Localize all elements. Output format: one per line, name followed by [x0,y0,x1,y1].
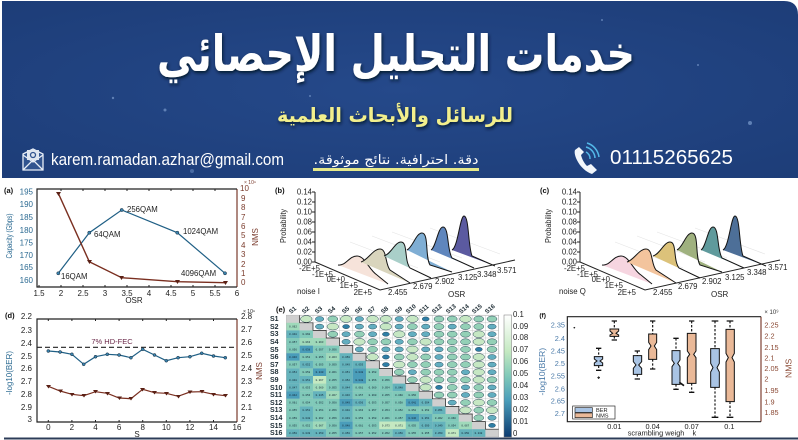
panel: chart b: -1E+5 [312,270,334,279]
left axis: 2.9 [21,403,33,412]
row labels: S12 [270,400,283,407]
left axis: 3 [28,415,33,424]
x axis: 6 [117,423,122,432]
lower triangle values: 0.061 0.054 0.052 0.058 0.049 0.056 0.053 0.057 0.058 0.041 0.054 [289,402,430,405]
panel: chart c: -2E+5 [564,264,586,273]
panel: chart b: 0.08 [297,218,312,226]
panel: chart b: 0.04 [297,238,313,246]
x axis: 5.5 [209,289,221,298]
panel: chart b: 2E+5 [354,288,373,297]
column labels: S14 [458,303,471,316]
x axis: 16 [233,423,242,432]
panel: chart b: 3.571 [497,266,517,275]
right axis: 2.15 [764,343,779,352]
panel: chart c: 3.571 [768,263,788,272]
left axis: 2.4 [21,339,33,348]
x axis: 6 [235,289,240,298]
left axis [551,321,565,418]
panel: chart c: -1E+5 [577,270,599,279]
banner [2,1,798,178]
axis titles: NMS [784,358,794,378]
quality labels: 64QAM [94,230,120,239]
colorbar: 0 [513,429,518,438]
left axis: 2.55 [551,372,565,381]
column labels: S7 [367,305,378,316]
left axis: 195 [20,188,34,196]
right axis: 1.95 [764,386,779,395]
row labels: S6 [270,354,279,361]
right axis: 6 [241,222,246,231]
row labels: S1 [270,316,279,323]
panel: chart c: 0.14 [562,188,578,196]
quality labels: 1024QAM [183,227,218,236]
right axis: 2.25 [764,321,779,330]
column labels: S6 [354,305,365,316]
axis titles: Capacity (Gbps) [5,213,14,258]
column labels: S9 [394,305,405,316]
row labels: S15 [270,423,283,430]
left axis: 2.6 [555,384,565,393]
panel: chart b: 0.10 [297,208,313,216]
x axis: 2.5 [77,289,89,298]
panel: chart c [540,186,788,299]
panel: chart c: 2.455 [653,288,673,297]
capacity line [57,208,227,275]
x axis: 0 [46,423,51,432]
right axis [764,309,779,417]
x axis: 14 [209,423,218,432]
column labels: S12 [431,303,444,316]
panel: chart b: 0.14 [297,188,313,196]
lower triangle values: 0.047 0.053 0.060 0.055 0.044 0.061 0.060 0.054 0.048 [289,386,403,389]
panel: chart c: OSR [711,290,729,299]
lower triangle values: 0.055 0.051 0.054 0.056 0.048 0.063 0.057 0.054 0.052 0.052 0.052 0.051 [289,409,443,412]
right axis: × 10⁹ [764,309,779,316]
panel: chart d: (d) [5,311,15,320]
row labels: S14 [270,415,283,422]
right axis: 1.85 [764,408,779,417]
row labels: S13 [270,407,283,414]
lower triangle values: 0.046 0.052 0.055 0.063 0.050 [289,356,350,359]
colorbar: 0.09 [513,322,528,331]
lower triangle values: 0.059 0.048 0.062 0.056 0.049 0.059 0.058 0.061 0.057 0.046 0.051 0.062 0.060 [289,417,456,420]
x axis: 0.01 [607,422,621,431]
left axis: 2.45 [551,347,565,356]
right axis: 2.7 [241,325,253,334]
email: karem.ramadan.azhar@gmail.com [51,150,284,169]
row labels: S10 [270,385,283,392]
colorbar: 0.03 [513,393,528,402]
column labels: S16 [484,303,497,316]
left axis: 190 [20,200,34,209]
x axis: 0.07 [685,422,699,431]
panel: chart c: 0.10 [562,208,578,216]
BER boxes [594,321,719,417]
right axis: 1.9 [764,397,775,406]
panel: chart a: (a) [4,186,14,195]
axis titles: NMS [251,228,260,246]
left axis: 165 [20,263,34,272]
right axis: 9 [241,194,246,203]
panel: chart c: 0.00 [562,258,578,266]
right axis [240,180,256,287]
x axis: 0.1 [724,422,734,431]
lower triangle values: 0.048 0.051 0.067 0.055 0.052 0.048 0.056 0.056 [289,379,390,382]
x axis: 2 [59,289,64,298]
column labels: S10 [405,303,418,316]
row labels: S16 [270,430,283,437]
lower triangle values: 0.042 0.056 0.045 0.067 0.046 0.057 0.060 0.055 0.060 0.056 [289,394,417,397]
axis titles [5,351,264,395]
row labels: S4 [270,339,279,346]
colorbar: 0.06 [513,357,528,366]
panel: chart b [275,186,517,299]
left axis: 2.35 [551,321,565,330]
panel: heatmap e [270,303,529,438]
right axis: 0 [241,278,246,287]
x axis: 3 [103,289,108,298]
panel: chart b: 0.06 [297,228,312,236]
lower triangle values [286,315,499,437]
x axis [607,422,734,438]
right axis: 4 [241,241,246,250]
phone number: 01115265625 [610,147,733,169]
ridges [338,216,495,284]
tagline underline [313,168,479,171]
panel: chart c: 2.679 [678,282,698,291]
right axis: × 10⁹ [243,309,255,315]
left axis: 2.7 [21,377,33,386]
upper triangle ellipses [300,315,499,429]
panel: chart c: 1E+5 [605,281,624,290]
column labels: S3 [314,305,325,316]
right axis: 2.2 [764,332,775,341]
x axis: 0.04 [646,422,660,431]
column labels: S4 [327,305,338,316]
icon: phone [575,143,599,174]
x axis: 5 [191,289,196,298]
left axis [20,188,34,285]
left axis: 175 [20,238,34,248]
panel: chart c: 0.02 [562,248,577,256]
column labels: S15 [471,303,484,316]
colorbar: 0.08 [513,333,528,342]
column labels: S1 [288,305,299,316]
panel: chart c: noise Q [559,287,586,296]
right axis: 2 [764,375,768,384]
panel: chart b: 2.679 [413,282,433,291]
left axis: 2.4 [555,334,565,343]
NMS line [46,385,228,400]
axis titles: -log10(BER) [537,348,547,395]
ridges [602,216,766,284]
axis titles: -log10(BER) [5,351,14,395]
lower triangle values: 0.055 0.052 0.067 0.058 0.048 0.061 0.053 0.073 0.071 0.055 0.050 0.049 0.054 0.067 [289,424,470,427]
right axis: 3 [241,250,246,259]
panel: chart b: 3.348 [477,270,497,279]
panel: chart c: 0.04 [562,238,578,246]
legend: NMS [596,414,609,420]
panel: chart c: Probability [544,209,553,243]
title: خدمات التحليل الإحصائي [157,25,635,83]
x axis: 12 [185,423,195,432]
x axis: 4 [147,289,152,298]
right axis: 7 [241,213,246,222]
right axis: 5 [241,231,246,240]
panel: chart b: Probability [279,209,288,243]
right axis: 2 [241,260,246,269]
column labels: S13 [445,303,458,316]
colorbar: 0.02 [513,405,528,414]
panel: chart b: 0.12 [297,198,312,206]
left axis: 2.5 [21,352,33,361]
column labels: S2 [301,305,312,316]
right axis: 1 [241,269,246,278]
lower triangle values: 0.057 0.063 0.063 [289,341,324,344]
x axis: 10 [162,423,171,432]
panel: chart b: -2E+5 [299,264,321,273]
row labels [270,316,283,437]
panel: chart c: 2E+5 [618,288,637,297]
x axis [33,289,240,305]
panel: chart c: 3.125 [725,273,745,282]
right axis: 2.1 [764,353,775,362]
right axis: 2.2 [241,390,253,399]
panel: chart b: (b) [275,186,285,195]
lower triangle values: 0.056 0.038 0.057 0.056 [289,348,337,351]
left axis: 2.7 [555,409,565,418]
left axis: 2.5 [555,359,565,368]
column labels [288,303,497,316]
panel: chart b: OSR [448,290,466,299]
x axis: 4 [93,423,98,432]
right axis: 2.3 [241,377,253,386]
right axis: 10 [240,184,249,193]
left axis: 180 [20,226,34,235]
panel: chart b: 3.125 [458,273,478,282]
NMS boxes [610,321,734,417]
right axis: 2.05 [764,364,779,373]
lower triangle values: 0.062 [289,326,297,329]
left axis [21,312,33,424]
left axis: 2.8 [21,390,33,399]
x axis: 8 [140,423,145,432]
right axis: 2.8 [241,312,253,321]
lower triangle values: 0.057 0.052 0.055 0.059 0.049 0.055 [289,364,364,367]
axis titles [537,348,794,395]
panel: chart b: 1E+5 [340,281,359,290]
panel: chart b: 2.455 [388,288,408,297]
right axis: 2.6 [241,338,253,347]
lower triangle values: 0.048 0.060 [289,333,311,336]
row labels: S11 [270,392,282,399]
panel: boxplot f: (f) [539,313,546,320]
panel: chart b: noise I [297,287,320,296]
row labels: S8 [270,369,279,376]
lower triangle values: 0.050 0.049 0.050 0.055 0.050 0.057 0.052 0.052 0.050 0.055 0.055 0.050 0.071 0.050 0.048 [289,432,483,435]
left axis: 185 [20,213,34,222]
panel: chart c: 0.08 [562,218,577,226]
x axis: 3.5 [121,289,133,298]
colorbar: 0.01 [513,417,528,426]
right axis: 2.5 [241,351,253,360]
right axis: 2 [241,415,246,424]
panel: chart b: 0E+0 [327,275,346,284]
colorbar: 0.07 [513,345,528,354]
column labels: S11 [418,303,431,316]
quality labels: 256QAM [127,205,158,214]
left axis: 2.2 [21,312,33,321]
colorbar: 0.05 [513,369,529,378]
column labels: S8 [380,305,391,316]
panel: chart b: 0.02 [297,248,312,256]
legend: BER [596,408,608,414]
colorbar: 0.1 [513,310,524,319]
x axis: OSR [125,296,143,305]
icon: envelope [23,149,43,170]
right axis: 8 [241,203,246,212]
x axis: 4.5 [165,289,177,298]
NMS line [56,192,228,285]
row labels: S9 [270,377,279,384]
legend [573,406,615,420]
row labels: S5 [270,347,279,354]
colorbar [504,310,529,438]
panel: chart b: 2.902 [435,277,455,286]
bottom border [4,438,798,440]
colorbar: 0.04 [513,381,529,390]
column labels: S5 [341,305,352,316]
panel: chart a [4,180,260,305]
panel: boxplot f [537,309,794,438]
right axis: × 10⁹ [244,180,256,186]
panel: chart b: 0.00 [297,258,313,266]
quality labels [61,205,218,281]
x axis: 1.5 [33,289,45,298]
axis titles: NMS [255,362,264,380]
right axis: 2.4 [241,364,253,373]
panel: chart c: 3.348 [747,268,767,277]
BER line [47,348,227,366]
left axis: 160 [20,276,34,285]
panel: chart c: 0.06 [562,228,577,236]
left axis: 2.65 [551,397,565,406]
x axis: scrambling weigh k [628,429,697,438]
panel: chart c: 0.12 [562,198,577,206]
x axis [46,423,242,439]
axis titles [5,213,260,258]
left axis: 170 [20,251,34,260]
panel: chart c: 0E+0 [592,275,611,284]
lower triangle values: 0.054 0.058 0.040 0.061 0.051 0.048 0.058 [289,371,377,374]
row labels: S7 [270,362,279,369]
left axis: 2.6 [21,364,33,373]
threshold line: 7% HD-FEC [91,337,133,346]
quality labels: 16QAM [61,272,87,281]
tagline: دقة. احترافية. نتائج موثوقة. [314,153,479,168]
left axis: 2.3 [21,326,33,335]
row labels: S3 [270,331,279,338]
panel: chart c: 2.902 [702,277,722,286]
panel: chart c: (c) [540,186,550,195]
subtitle: للرسائل والأبحاث العلمية [277,102,513,127]
row labels: S2 [270,324,279,331]
x axis: S [134,430,140,439]
quality labels: 4096QAM [181,269,216,278]
right axis: 2.1 [241,403,253,412]
x axis: 2 [70,423,75,432]
right axis [241,309,255,424]
panel: heatmap e: (e) [276,305,286,314]
panel: chart d [5,309,264,439]
